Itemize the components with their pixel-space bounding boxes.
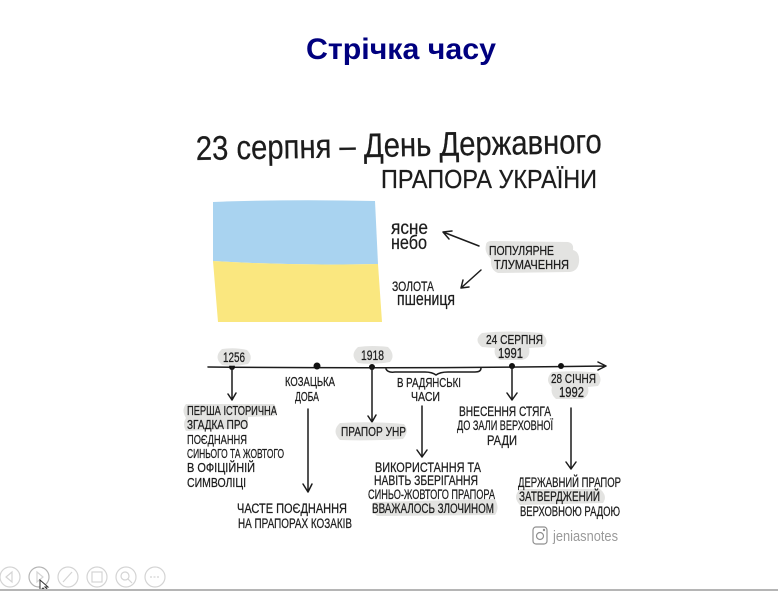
event 1256: ПЕРША ІСТОРИЧНА (187, 403, 277, 418)
timeline axis (208, 362, 606, 370)
event Cossack era (237, 374, 352, 531)
event 24 August 1991: 24 СЕРПНЯ (486, 332, 543, 347)
event 1256: СИМВОЛІЦІ (187, 475, 246, 490)
event Cossack era: ДОБА (295, 389, 319, 404)
icon: more (145, 567, 165, 587)
label: golden wheat: пшениця (397, 289, 455, 309)
event 1256 (184, 348, 284, 490)
event Cossack era: ЧАСТЕ ПОЄДНАННЯ (237, 501, 347, 516)
event 28 January 1992: ЗАТВЕРДЖЕНИЙ (519, 489, 600, 504)
callout: popular interpretation: ПОПУЛЯРНЕ (489, 244, 554, 258)
icon: search (116, 567, 136, 587)
label: clear sky: ясне (391, 218, 428, 239)
event Cossack era: КОЗАЦЬКА (285, 374, 335, 389)
mouse cursor (40, 580, 49, 591)
handwritten heading (195, 123, 602, 194)
Ukrainian flag (213, 200, 382, 322)
icon: instagram (533, 527, 547, 544)
callout: popular interpretation: ТЛУМАЧЕННЯ (494, 258, 569, 272)
event Soviet times: НАВІТЬ ЗБЕРІГАННЯ (374, 473, 478, 488)
icon: next (29, 567, 49, 587)
label: clear sky: небо (391, 233, 427, 254)
event 1256: СИНЬОГО ТА ЖОВТОГО (187, 446, 284, 461)
event 1256: ПОЄДНАННЯ (187, 432, 247, 447)
arrow to sky (443, 231, 479, 246)
callout: popular interpretation (486, 241, 579, 273)
bottom edge (0, 589, 778, 591)
event Soviet times (368, 368, 498, 516)
event 28 January 1992: 1992 (559, 384, 584, 401)
event Soviet times: ВВАЖАЛОСЬ ЗЛОЧИНОМ (372, 501, 494, 516)
label: golden wheat (392, 278, 455, 309)
handwritten heading: 23 серпня – День Державного (195, 123, 602, 168)
icon: pen (58, 567, 78, 587)
event 1918 (336, 346, 407, 440)
event 28 January 1992 (516, 371, 621, 519)
event Soviet times: ЧАСИ (411, 389, 440, 404)
event 1256: ЗГАДКА ПРО (187, 417, 248, 432)
event 1918: 1918 (361, 347, 384, 363)
event 24 August 1991: ВНЕСЕННЯ СТЯГА (459, 404, 551, 419)
event 1256: В ОФІЦІЙНІЙ (187, 460, 255, 475)
event 24 August 1991: 1991 (498, 345, 523, 362)
timeline points (229, 362, 564, 370)
icon: slides (87, 567, 107, 587)
event 1918: ПРАПОР УНР (341, 424, 406, 439)
event 1256: 1256 (223, 349, 245, 365)
credit: jeniasnotes (533, 527, 618, 545)
event 24 August 1991: РАДИ (487, 433, 517, 448)
event 24 August 1991: ДО ЗАЛИ ВЕРХОВНОЇ (457, 418, 553, 433)
arrow to wheat (461, 270, 481, 288)
timeline (184, 332, 621, 531)
event Soviet times: ВИКОРИСТАННЯ ТА (375, 460, 481, 475)
handwritten heading: ПРАПОРА УКРАЇНИ (381, 164, 597, 194)
event 28 January 1992: ДЕРЖАВНИЙ ПРАПОР (518, 475, 621, 490)
label: golden wheat: ЗОЛОТА (392, 278, 434, 294)
event Soviet times: СИНЬО-ЖОВТОГО ПРАПОРА (368, 487, 495, 502)
event 28 January 1992: ВЕРХОВНОЮ РАДОЮ (520, 504, 620, 519)
event 28 January 1992: 28 СІЧНЯ (551, 371, 596, 386)
credit: jeniasnotes: jeniasnotes (552, 528, 618, 545)
slide title: Стрічка часу (306, 33, 496, 66)
slide show controls (0, 567, 165, 587)
icon: previous (0, 567, 20, 587)
event Cossack era: НА ПРАПОРАХ КОЗАКІВ (238, 516, 352, 531)
brace (386, 368, 481, 375)
event Soviet times: В РАДЯНСЬКІ (397, 375, 461, 390)
event 24 August 1991 (457, 332, 553, 448)
flag meaning labels (391, 218, 579, 309)
label: clear sky (391, 218, 428, 254)
